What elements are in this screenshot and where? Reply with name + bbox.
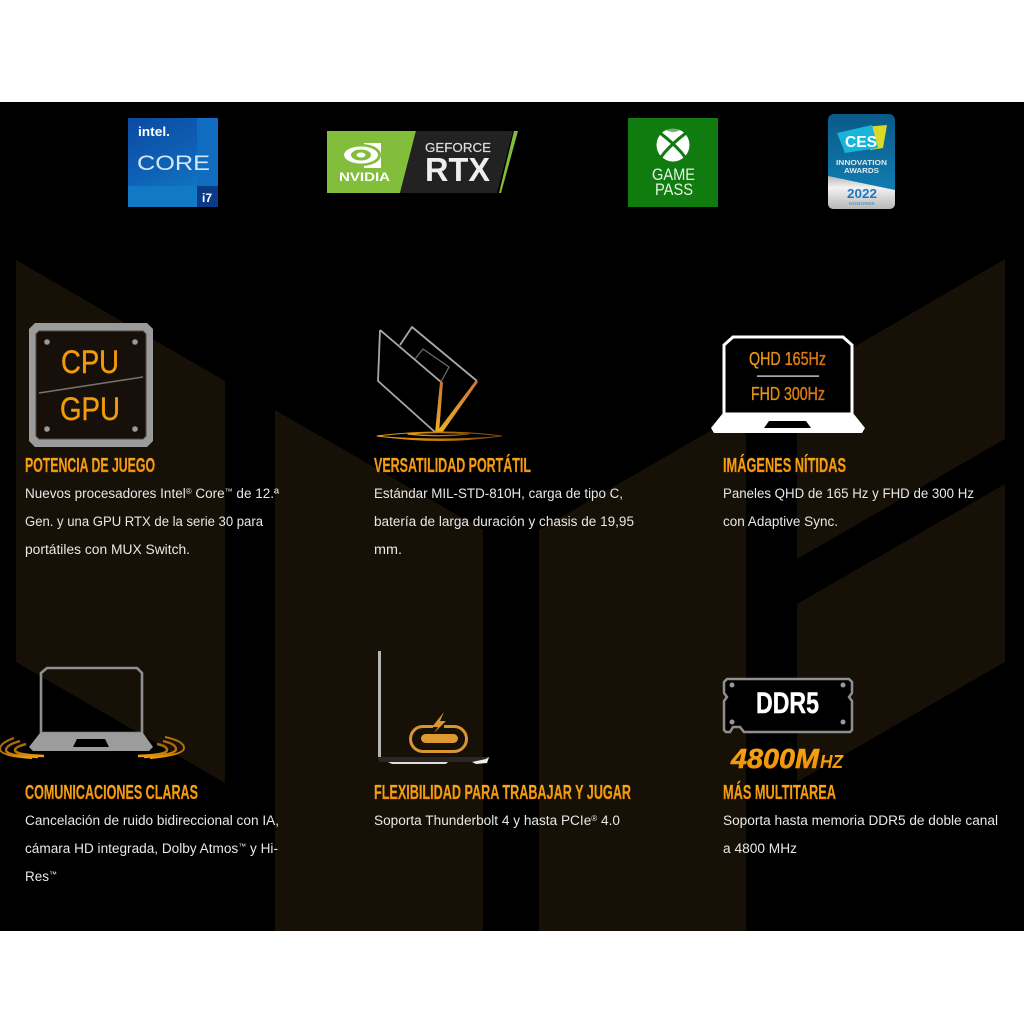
background emblem pattern (16, 259, 1005, 931)
text block: 4.0 (597, 813, 620, 828)
logo: Intel Core i7: CORE (137, 152, 210, 175)
panel: flexibilidad para trabajar y jugar (374, 651, 631, 828)
text block (374, 486, 634, 557)
text block: a 4800 MHz (723, 841, 797, 856)
icon: DDR5 memory 4800MHz (724, 679, 852, 774)
text block: batería de larga duración y chasis de 19,95 (374, 514, 634, 529)
icon: laptop with refresh rates: FHD 300Hz (751, 384, 825, 404)
panel: versatilidad portátil (374, 327, 634, 557)
heading: COMUNICACIONES CLARAS (25, 782, 198, 804)
logo: Intel Core i7 (128, 118, 218, 207)
icon: laptop with sound waves (0, 668, 184, 758)
text block: Estándar MIL-STD-810H, carga de tipo C, (374, 486, 623, 501)
text block: Core (192, 486, 225, 501)
logo: Intel Core i7: intel. (138, 124, 170, 139)
logo: NVIDIA GeForce RTX: GEFORCE (425, 141, 491, 155)
text block (723, 813, 998, 856)
logo: CES Innovation Awards 2022: AWARDS (844, 168, 879, 175)
text block (25, 813, 279, 884)
text block (723, 486, 974, 529)
text block: ™ (225, 487, 233, 496)
text block: mm. (374, 542, 402, 557)
logo: Intel Core i7: i7 (202, 191, 212, 205)
logo: Xbox Game Pass: GAME (652, 166, 695, 184)
heading: VERSATILIDAD PORTÁTIL (374, 454, 531, 477)
logo: NVIDIA GeForce RTX: RTX (425, 151, 490, 188)
logo: NVIDIA GeForce RTX: NVIDIA (339, 172, 390, 184)
text block: Soporta Thunderbolt 4 y hasta PCIe (374, 813, 589, 828)
text block: y Hi- (246, 841, 278, 856)
icon: laptop side with USB-C port (378, 651, 490, 764)
icon: DDR5 memory 4800MHz: HZ (820, 752, 844, 772)
logo: CES Innovation Awards 2022: HONOREE (849, 201, 875, 206)
text block: Res (25, 869, 49, 884)
icon: CPU GPU chip: CPU (61, 344, 119, 380)
heading: IMÁGENES NÍTIDAS (723, 454, 846, 477)
panel: potencia de juego (25, 323, 280, 557)
text block: de 12.ª (233, 486, 280, 501)
logo: CES Innovation Awards 2022 (828, 114, 895, 209)
text block: Soporta hasta memoria DDR5 de doble canal (723, 813, 998, 828)
icon: folding laptop (377, 327, 502, 441)
text block: ® (591, 814, 597, 823)
text block: con Adaptive Sync. (723, 514, 838, 529)
text block: Paneles QHD de 165 Hz y FHD de 300 Hz (723, 486, 974, 501)
text block: cámara HD integrada, Dolby Atmos (25, 841, 237, 856)
logo: CES Innovation Awards 2022: INNOVATION (836, 160, 887, 167)
logo: Xbox Game Pass (628, 118, 718, 207)
text block: Nuevos procesadores Intel (25, 486, 186, 501)
heading: POTENCIA DE JUEGO (25, 455, 155, 477)
text block: Gen. y una GPU RTX de la serie 30 para (25, 514, 263, 529)
panel: imágenes nítidas (711, 337, 974, 529)
text block: ™ (49, 870, 57, 879)
heading: MÁS MULTITAREA (723, 781, 836, 804)
icon: DDR5 memory 4800MHz: DDR5 (756, 687, 819, 720)
icon: DDR5 memory 4800MHz: 4800M (730, 743, 820, 774)
logo: CES Innovation Awards 2022: 2022 (847, 187, 877, 201)
heading: FLEXIBILIDAD PARA TRABAJAR Y JUGAR (374, 782, 631, 804)
icon: CPU GPU chip: GPU (60, 391, 120, 427)
panel: más multitarea (723, 679, 998, 856)
icon: CPU GPU chip (29, 323, 153, 447)
text block: ® (186, 487, 192, 496)
logo: CES Innovation Awards 2022: CES (845, 134, 877, 151)
text block: Cancelación de ruido bidireccional con IA, (25, 813, 279, 828)
logo: NVIDIA GeForce RTX (327, 131, 518, 193)
icon: laptop with refresh rates: QHD 165Hz (749, 349, 826, 369)
panel: comunicaciones claras (0, 668, 279, 884)
text block: ™ (238, 842, 246, 851)
icon: laptop with refresh rates (711, 337, 865, 433)
logo: Xbox Game Pass: PASS (655, 181, 693, 199)
text block: portátiles con MUX Switch. (25, 542, 190, 557)
text block (25, 486, 280, 557)
